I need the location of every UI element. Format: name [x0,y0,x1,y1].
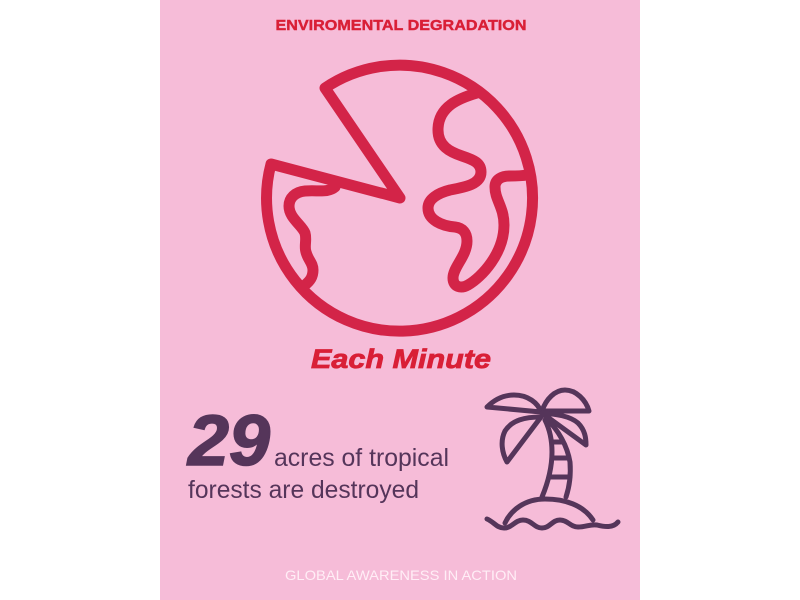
big number: 29 [186,402,271,481]
icon: palm tree island [487,390,618,528]
heading: Each Minute: Each Minute [311,344,491,374]
statistic: 29 acres of tropical forests are destroyed [186,402,449,504]
panel: pink poster background [160,0,640,600]
title: ENVIROMENTAL DEGRADATION [276,18,526,34]
statistic line two: forests are destroyed [188,476,419,504]
statistic line one: acres of tropical [274,444,449,472]
footer text: GLOBAL AWARENESS IN ACTION [285,567,517,583]
icon: globe with missing wedge [267,65,533,331]
